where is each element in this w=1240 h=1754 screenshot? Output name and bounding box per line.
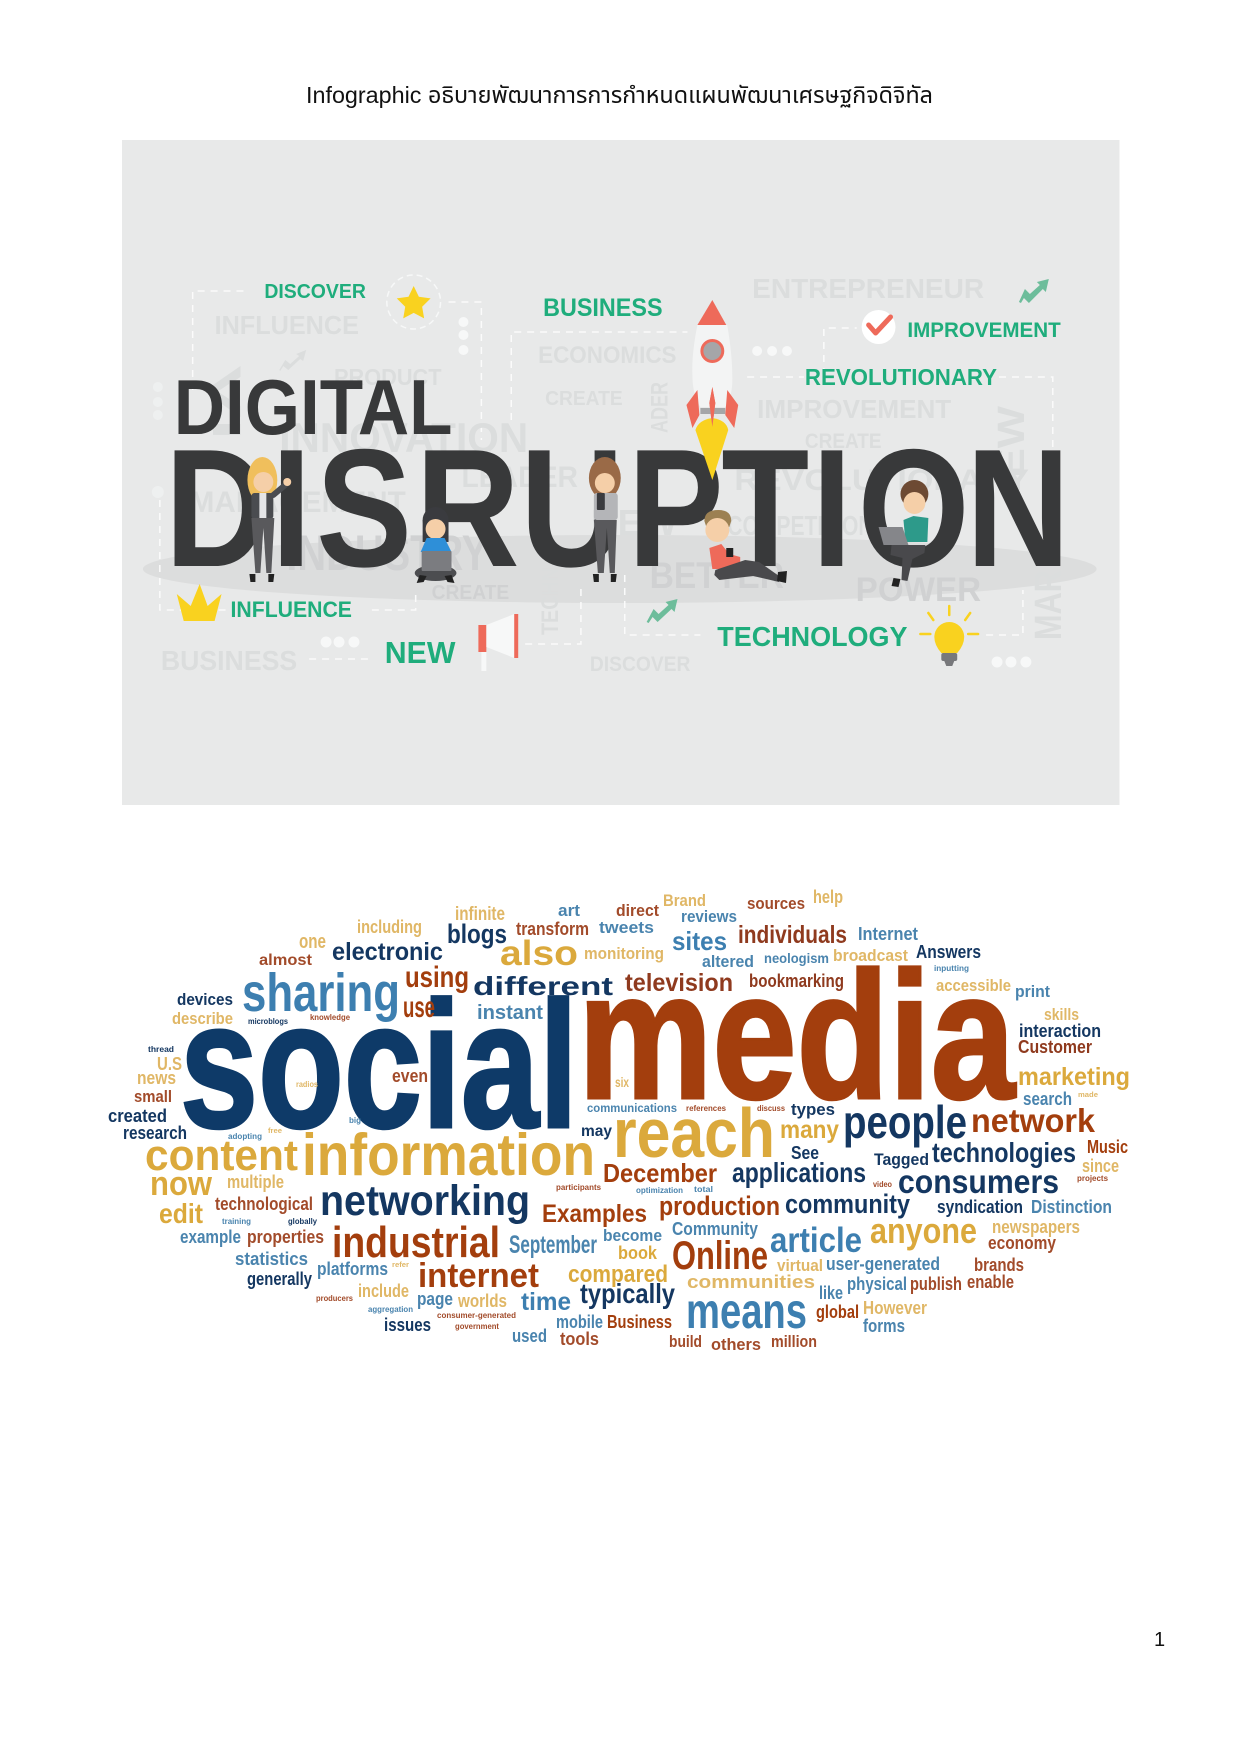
brown words: small — [134, 1087, 172, 1106]
light gold words: including — [357, 917, 422, 937]
white dots — [152, 317, 1031, 668]
green keywords: IMPROVEMENT — [907, 319, 1061, 342]
blue words: training — [222, 1217, 251, 1226]
background grey keywords: INFLUENCE — [215, 312, 359, 340]
brown words: technological — [215, 1194, 313, 1214]
dark blue words: devices — [177, 990, 233, 1009]
background grey keywords: IA — [206, 364, 249, 440]
light gold words: made — [1078, 1092, 1098, 1099]
brown words: sources — [747, 894, 805, 913]
brown words: direct — [616, 901, 659, 920]
blue words: aggregation — [368, 1305, 413, 1314]
light gold words: since — [1082, 1156, 1119, 1176]
gold words: many — [780, 1116, 839, 1144]
light gold words: Brand — [663, 891, 706, 910]
light gold words: multiple — [227, 1172, 284, 1192]
background grey keywords: ADER — [647, 382, 674, 433]
icon: rocket — [686, 300, 738, 480]
person: blonde woman waving — [247, 457, 291, 582]
light gold words: six — [615, 1074, 629, 1090]
word cloud: social media — [108, 887, 1130, 1354]
background grey keywords: IMPROVEMENT — [757, 396, 951, 424]
blue words: physical — [847, 1274, 907, 1294]
page number: 1 — [1154, 1629, 1165, 1651]
word: social: social — [180, 965, 578, 1166]
light gold words: free — [268, 1128, 282, 1135]
gold words: reach — [613, 1094, 775, 1172]
brown words: knowledge — [310, 1013, 351, 1022]
background grey keywords: MANAGEMENT — [190, 486, 406, 519]
dark blue words: blogs — [447, 919, 507, 949]
person: man lying with phone — [704, 510, 787, 583]
person: woman with phone — [589, 457, 621, 582]
blue words: optimization — [636, 1186, 683, 1195]
brown words: projects — [1077, 1174, 1109, 1183]
green keywords: TECHNOLOGY — [717, 621, 908, 652]
blue words: page — [417, 1289, 453, 1309]
brown words: enable — [967, 1272, 1014, 1292]
blue words: mobile — [556, 1312, 603, 1332]
brown words: consumer-generated — [437, 1311, 516, 1320]
title: Infographic อธิบายพัฒนาการการกำหนดแผนพัฒนาเศรษฐกิจดิจิทัล — [306, 82, 933, 108]
brown words: properties — [247, 1227, 324, 1247]
light gold words: help — [813, 887, 843, 907]
blue words: total — [694, 1185, 713, 1194]
dark blue words: Tagged — [874, 1150, 929, 1169]
icon: check mark — [862, 310, 896, 344]
person: woman with laptop in O — [879, 480, 928, 587]
rust red words: December — [603, 1158, 717, 1188]
background grey keywords: ENTREPRENEUR — [752, 273, 984, 304]
brown words: almost — [259, 952, 313, 969]
dark blue words: microblogs — [248, 1017, 289, 1026]
gold words: edit — [159, 1198, 203, 1229]
brown words: publish — [910, 1274, 962, 1294]
rust red words: production — [659, 1191, 780, 1221]
icon: grey arrow — [279, 350, 306, 371]
blue words: forms — [863, 1316, 905, 1336]
green keywords — [231, 281, 1061, 670]
dark blue words: research — [123, 1123, 187, 1143]
icon: crown — [177, 584, 222, 621]
blue words: inputting — [934, 963, 969, 973]
light gold words: worlds — [457, 1291, 507, 1311]
light gold words: refer — [392, 1262, 409, 1269]
brown words: participants — [556, 1183, 602, 1192]
light gold words: accessible — [936, 976, 1011, 995]
brown words — [134, 894, 1109, 1354]
rust red words — [332, 961, 1128, 1332]
rust red words: Online — [672, 1234, 768, 1278]
rust red words: use — [403, 991, 435, 1024]
light gold words: one — [299, 931, 326, 953]
background grey keywords: PRODUCT — [334, 364, 442, 390]
brown words: bookmarking — [749, 971, 844, 991]
background grey keywords: COMPETITION — [727, 510, 874, 541]
background grey keywords: EW — [991, 406, 1033, 478]
dark blue words: types — [791, 1100, 835, 1119]
rust red words: Music — [1087, 1137, 1128, 1157]
light gold words: U.S — [157, 1054, 182, 1074]
dark blue words: Answers — [916, 942, 981, 962]
rust red words: Examples — [542, 1200, 647, 1228]
icon: light bulb — [920, 606, 978, 666]
brown words: discuss — [757, 1104, 786, 1113]
rust red words: industrial — [332, 1218, 500, 1267]
brown words: government — [455, 1322, 499, 1331]
blue words: reviews — [681, 907, 737, 926]
background grey keywords: BETTER — [650, 555, 784, 596]
brown words: tools — [560, 1329, 599, 1349]
gold words: information — [302, 1122, 595, 1188]
dark blue words — [108, 919, 1101, 1335]
brown words: television — [625, 969, 733, 997]
green keywords: INFLUENCE — [231, 597, 352, 622]
background grey keywords: MAR — [1028, 570, 1070, 640]
light gold words: include — [358, 1281, 409, 1301]
brown words: others — [711, 1335, 761, 1354]
light gold words: communities — [687, 1272, 815, 1292]
light gold words: news — [137, 1068, 176, 1088]
blue words — [180, 901, 1112, 1346]
blue words: means — [686, 1283, 807, 1339]
background grey keywords: NEW — [591, 502, 678, 543]
dark blue words: community — [785, 1189, 910, 1219]
dark blue words: electronic — [332, 938, 443, 966]
dark blue words: consumers — [898, 1163, 1059, 1200]
rust red words: Business — [607, 1312, 672, 1332]
icon: green growth arrow — [647, 599, 677, 623]
gold words: content — [145, 1131, 298, 1180]
blue words: neologism — [764, 950, 829, 966]
light gold words: broadcast — [833, 946, 908, 965]
blue words: like — [819, 1283, 843, 1303]
rust red words: using — [405, 961, 469, 994]
light gold words: radios — [296, 1080, 318, 1089]
light gold words: describe — [172, 1009, 233, 1028]
blue words: Community — [672, 1219, 758, 1239]
blue words: big — [349, 1116, 361, 1125]
blue words: platforms — [317, 1259, 388, 1279]
dark blue words: interaction — [1019, 1021, 1101, 1041]
blue words: altered — [702, 952, 754, 971]
brown words: Customer — [1018, 1037, 1092, 1057]
blue words: user-generated — [826, 1254, 940, 1274]
brown words: transform — [516, 919, 589, 939]
brown words: even — [392, 1066, 428, 1086]
blue words: sharing — [242, 963, 400, 1023]
green keywords: REVOLUTIONARY — [805, 364, 997, 390]
icon: star — [387, 275, 441, 329]
blue words: time — [521, 1288, 571, 1316]
background grey keywords: CREATE — [432, 582, 509, 604]
blue words: September — [509, 1231, 597, 1259]
dark blue words: may — [581, 1123, 612, 1140]
light gold words — [137, 887, 1119, 1318]
background grey keywords: INDUSTRY — [286, 525, 488, 581]
blue words: used — [512, 1326, 547, 1346]
dark blue words: different — [473, 971, 613, 1001]
heading: DISRUPTION: DISRUPTION — [165, 415, 1070, 603]
dark blue words: networking — [320, 1177, 530, 1225]
dark blue words: applications — [732, 1157, 866, 1188]
dark blue words: technologies — [932, 1137, 1076, 1168]
brown words: producers — [316, 1294, 354, 1303]
dark blue words: thread — [148, 1044, 174, 1054]
blue words: print — [1015, 982, 1050, 1001]
light gold words: monitoring — [584, 944, 664, 963]
blue words: tweets — [599, 918, 654, 937]
blue words: sites — [672, 926, 727, 956]
brown words: build — [669, 1332, 702, 1351]
icon: growth arrow top right — [1019, 279, 1049, 303]
dark blue words: syndication — [937, 1197, 1023, 1217]
background grey keywords: LEADER — [461, 461, 578, 494]
background grey keywords: REVOLUTIONARY — [734, 464, 1029, 497]
background grey keywords — [161, 273, 1070, 676]
blue words: Internet — [858, 924, 918, 944]
green keywords: NEW — [385, 635, 456, 670]
background grey keywords: DISCOVER — [590, 653, 690, 676]
brown words: million — [771, 1332, 817, 1351]
green keywords: BUSINESS — [543, 294, 663, 322]
panel: digital disruption illustration — [122, 140, 1119, 805]
gold words: book — [618, 1243, 658, 1263]
background grey keywords: CREATE — [545, 388, 623, 410]
gold words: anyone — [870, 1210, 977, 1251]
dark blue words: generally — [247, 1269, 312, 1289]
blue words: article — [770, 1221, 862, 1260]
rust red words: network — [971, 1102, 1096, 1139]
blue words: Distinction — [1031, 1197, 1112, 1217]
dark blue words: people — [843, 1096, 967, 1148]
blue words: communications — [587, 1101, 677, 1115]
blue words: adopting — [228, 1132, 262, 1141]
brown words: video — [873, 1180, 892, 1189]
brown words: references — [686, 1104, 727, 1113]
dark blue words: issues — [384, 1315, 431, 1335]
dark blue words: typically — [580, 1278, 675, 1309]
light gold words: virtual — [777, 1256, 823, 1275]
light gold words: However — [863, 1298, 927, 1318]
blue words: art — [558, 901, 580, 920]
blue words: example — [180, 1227, 241, 1247]
blue words: become — [603, 1226, 662, 1245]
rust red words: internet — [418, 1257, 539, 1295]
icon: megaphone — [478, 614, 518, 671]
word: media: media — [578, 935, 1016, 1137]
green keywords: DISCOVER — [264, 281, 366, 303]
blue words: search — [1023, 1089, 1072, 1109]
blue words: statistics — [235, 1249, 308, 1269]
background grey keywords: INNOVATION — [279, 414, 528, 461]
background grey keywords: BUSINESS — [161, 645, 297, 676]
blue words: instant — [477, 1002, 543, 1024]
brown words: individuals — [738, 921, 847, 949]
background grey keywords: ECONOMICS — [538, 342, 677, 369]
light gold words: newspapers — [992, 1217, 1080, 1237]
dark blue words: globally — [288, 1217, 318, 1226]
dark blue words: See — [791, 1143, 819, 1163]
light gold words: skills — [1044, 1005, 1079, 1024]
background grey keywords: POWER — [856, 571, 981, 609]
brown words: economy — [988, 1233, 1056, 1253]
person: woman sitting with laptop — [415, 507, 456, 583]
dark blue words: created — [108, 1106, 167, 1126]
rust red words: global — [816, 1302, 859, 1322]
ground shadow ellipse — [143, 535, 1097, 603]
gold words: now — [150, 1165, 213, 1203]
background grey keywords: TECHN — [537, 567, 564, 635]
gold words: marketing — [1018, 1063, 1130, 1091]
heading: DIGITAL: DIGITAL — [174, 365, 453, 451]
light gold words: infinite — [455, 904, 505, 925]
gold words — [145, 934, 1130, 1288]
gold words: also — [500, 934, 578, 973]
brown words: brands — [974, 1255, 1024, 1275]
gold words: compared — [568, 1261, 668, 1288]
background grey keywords: CREATE — [805, 430, 882, 453]
